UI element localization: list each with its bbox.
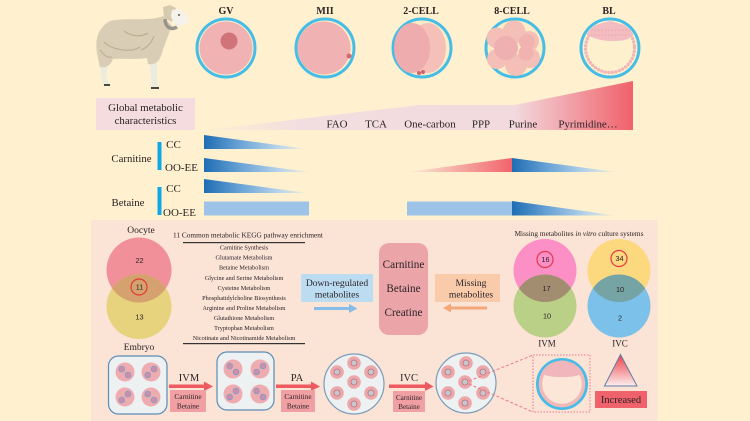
venn: IVM: IVM bbox=[538, 338, 556, 348]
panel: lower analysis bbox=[91, 220, 658, 421]
oocyte: MII bbox=[296, 19, 354, 77]
venn: IVC: 10 bbox=[616, 285, 624, 294]
list: KEGG pathway enrichment: Betaine Metabolism bbox=[219, 264, 269, 272]
embryo: 8-cell bbox=[486, 19, 544, 77]
illustration: sheep bbox=[96, 5, 189, 89]
list: KEGG pathway enrichment bbox=[173, 230, 323, 344]
list: KEGG pathway enrichment: Phosphatidylcholine Biosynthesis bbox=[202, 295, 286, 302]
bar: betaine OO-EE bbox=[204, 202, 309, 216]
callout: missing metabolites: Missing bbox=[456, 278, 487, 289]
embryo: 2-cell bbox=[393, 19, 451, 77]
metabolite pathway labels: Purine bbox=[509, 118, 537, 130]
list: KEGG pathway enrichment: Carnitine Synthesis bbox=[220, 244, 269, 252]
callout: down-regulated metabolites bbox=[301, 274, 373, 302]
arrow: IVM step: Carnitine bbox=[174, 392, 202, 401]
list: KEGG pathway enrichment: Glycine and Serine Metabolism bbox=[205, 275, 283, 282]
arrow: PA step: PA bbox=[291, 373, 304, 384]
venn: oocyte and embryo bbox=[106, 226, 172, 353]
arrow: IVC step bbox=[389, 373, 434, 412]
panel: carnitine betaine creatine: Betaine bbox=[386, 283, 421, 295]
arrow: IVM step: Betaine bbox=[177, 402, 199, 410]
list: KEGG pathway enrichment: Glutamate Metabolism bbox=[216, 254, 273, 262]
arrow: IVM step bbox=[169, 373, 213, 412]
row labels: carnitine: OO-EE bbox=[165, 162, 198, 174]
bar: betaine OO-EE falling bbox=[512, 201, 616, 216]
stage label: 8-CELL: 8-CELL bbox=[494, 6, 530, 17]
venn: oocyte and embryo: 13 bbox=[135, 312, 144, 322]
arrow: missing to metabolites bbox=[443, 304, 487, 312]
arrow: IVC step: IVC bbox=[400, 373, 418, 384]
metabolite pathway labels bbox=[327, 118, 618, 130]
venn: IVM: 10 bbox=[543, 312, 551, 320]
dish: activated embryos bbox=[324, 354, 384, 414]
bar: carnitine OO-EE falling bbox=[512, 158, 616, 172]
callout: down-regulated metabolites: Down-regulated bbox=[306, 278, 368, 289]
arrow: IVC step: Carnitine bbox=[396, 394, 422, 402]
stage label: BL: BL bbox=[602, 6, 616, 17]
venn: oocyte and embryo: Embryo bbox=[124, 343, 155, 353]
venn: oocyte and embryo: 11 bbox=[136, 282, 143, 292]
label: global metabolic characteristics: characteristics bbox=[115, 115, 176, 127]
arrow: PA step: Carnitine bbox=[284, 392, 312, 401]
stage label: 2-CELL: 2-CELL bbox=[403, 6, 439, 17]
bar: betaine OO-EE plateau bbox=[407, 202, 512, 216]
callout: missing metabolites bbox=[435, 274, 500, 302]
metabolite pathway labels: FAO bbox=[327, 118, 348, 130]
venn: IVM bbox=[514, 239, 576, 348]
callout: missing metabolites: metabolites bbox=[449, 290, 493, 300]
metabolite pathway labels: Pyrimidine… bbox=[558, 118, 618, 130]
arrow: down-regulated to metabolites bbox=[314, 304, 358, 313]
dish: cultured embryos bbox=[436, 353, 496, 413]
legend: increased label: Increased bbox=[601, 395, 642, 406]
row labels: betaine: CC bbox=[166, 183, 181, 195]
bar: carnitine OO-EE bbox=[204, 158, 310, 172]
zoom lines and blastocyst inset bbox=[469, 355, 590, 412]
row labels: carnitine: CC bbox=[166, 139, 181, 151]
bar: betaine CC bbox=[204, 179, 308, 193]
dish: matured oocytes bbox=[217, 352, 274, 410]
row labels: betaine: Betaine bbox=[112, 197, 145, 209]
venn: oocyte and embryo: Oocyte bbox=[127, 226, 155, 236]
venn: IVC: 34 bbox=[615, 254, 624, 263]
arrow: IVC step: Betaine bbox=[398, 403, 420, 411]
embryo: blastocyst bbox=[581, 19, 639, 77]
panel: carnitine betaine creatine bbox=[379, 243, 428, 335]
callout: down-regulated metabolites: metabolites bbox=[315, 290, 359, 300]
arrow: PA step bbox=[276, 373, 320, 412]
metabolite pathway labels: One-carbon bbox=[404, 118, 456, 130]
row labels: carnitine: Carnitine bbox=[111, 153, 152, 165]
arrow: IVM step: IVM bbox=[179, 373, 200, 384]
label: global metabolic characteristics bbox=[96, 98, 195, 130]
heading: missing metabolites in vitro: Missing metabolites in vitro culture systems bbox=[515, 229, 644, 238]
venn: IVC: IVC bbox=[612, 338, 628, 348]
venn: oocyte and embryo: 22 bbox=[135, 256, 144, 265]
panel: carnitine betaine creatine: Carnitine bbox=[383, 259, 424, 271]
row labels: betaine: OO-EE bbox=[163, 207, 196, 219]
bar: carnitine OO-EE rising bbox=[408, 158, 512, 172]
bar: carnitine CC bbox=[204, 135, 307, 149]
list: KEGG pathway enrichment: 11 Common metabolic KEGG pathway enrichment bbox=[173, 230, 323, 240]
row labels: carnitine bbox=[111, 139, 198, 174]
list: KEGG pathway enrichment: Cysteine Metabolism bbox=[218, 285, 271, 292]
list: KEGG pathway enrichment: Tryptophan Metabolism bbox=[214, 325, 274, 332]
venn: IVM: 17 bbox=[542, 284, 551, 293]
arrow: PA step: Betaine bbox=[287, 402, 309, 410]
oocyte: GV bbox=[197, 19, 255, 77]
label: global metabolic characteristics: Global metabolic bbox=[108, 102, 183, 114]
stage label: GV: GV bbox=[218, 6, 234, 17]
dish: oocytes before IVM bbox=[108, 356, 167, 414]
metabolite pathway labels: TCA bbox=[365, 118, 387, 130]
legend: increased triangle bbox=[604, 354, 637, 386]
venn: IVC bbox=[588, 239, 650, 348]
wedge: increasing global metabolism bbox=[205, 81, 633, 130]
list: KEGG pathway enrichment: Glutathione Metabolism bbox=[214, 315, 274, 322]
list: KEGG pathway enrichment: Nicotinate and Nicotinamide Metabolism bbox=[193, 335, 295, 342]
list: KEGG pathway enrichment: Arginine and Proline Metabolism bbox=[203, 305, 286, 312]
stage label: MII: MII bbox=[316, 6, 334, 17]
legend: increased label bbox=[595, 391, 647, 408]
metabolite pathway labels: PPP bbox=[472, 118, 490, 130]
venn: IVM: 16 bbox=[541, 255, 550, 264]
row labels: betaine bbox=[112, 183, 196, 219]
venn: IVC: 2 bbox=[618, 314, 622, 322]
panel: carnitine betaine creatine: Creatine bbox=[385, 307, 422, 319]
